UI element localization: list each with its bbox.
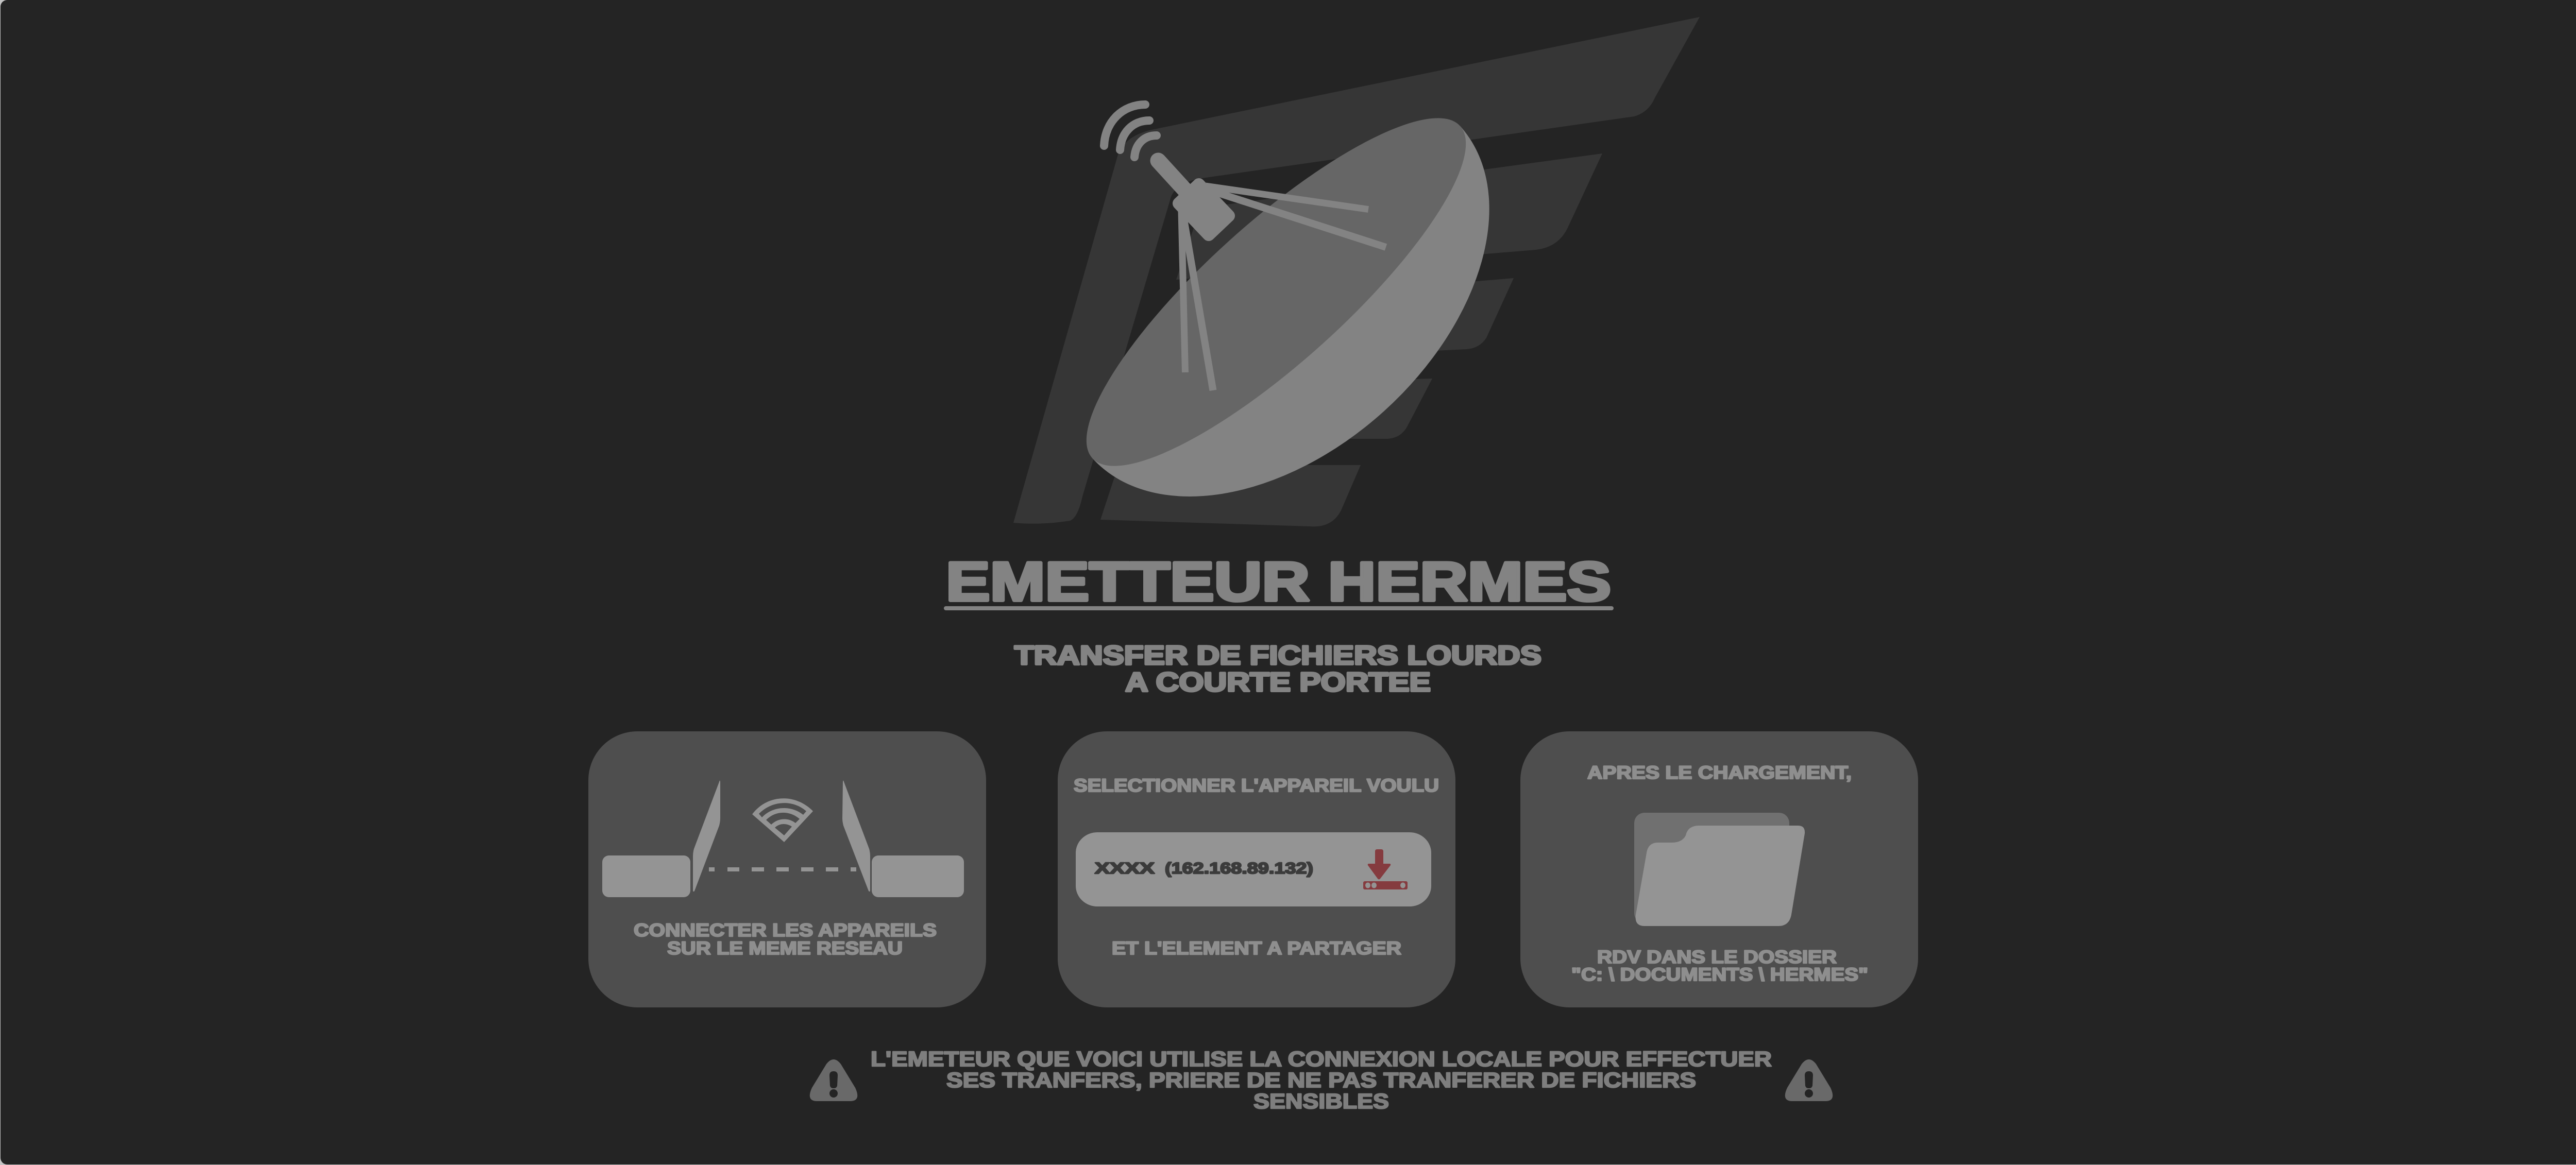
panel: connect devices xyxy=(588,731,986,1007)
device name: XXXX xyxy=(1095,859,1155,877)
caption xyxy=(1571,947,1868,985)
caption: "C: \ DOCUMENTS \ HERMES" xyxy=(1571,965,1868,985)
device name: (162.168.89.132) xyxy=(1165,859,1313,877)
title underline xyxy=(944,606,1614,610)
warning text xyxy=(871,1047,1772,1113)
warning text: SENSIBLES xyxy=(1253,1089,1389,1113)
warning text: SES TRANFERS, PRIERE DE NE PAS TRANFERER DE FICHIERS xyxy=(946,1068,1696,1092)
icon: download xyxy=(1363,849,1408,889)
dish face xyxy=(1046,74,1506,510)
dashed connection xyxy=(709,867,856,871)
logo: winged F emblem xyxy=(1013,17,1700,526)
device name xyxy=(1095,859,1313,877)
caption: CONNECTER LES APPAREILS xyxy=(634,920,937,940)
icon: satellite dish xyxy=(1046,74,1568,577)
icon: right laptop xyxy=(842,781,964,897)
panel: select device xyxy=(1058,731,1455,1007)
caption: SUR LE MEME RESEAU xyxy=(667,938,903,958)
title: EMETTEUR HERMES xyxy=(946,551,1611,612)
icon: left laptop xyxy=(602,781,720,897)
subtitle xyxy=(1014,641,1541,697)
warning text: L'EMETEUR QUE VOICI UTILISE LA CONNEXION LOCALE POUR EFFECTUER xyxy=(871,1047,1772,1071)
heading: SELECTIONNER L'APPAREIL VOULU xyxy=(1074,776,1439,796)
subtitle: A COURTE PORTEE xyxy=(1125,667,1431,697)
icon: warning right xyxy=(1785,1059,1833,1101)
heading: APRES LE CHARGEMENT, xyxy=(1587,763,1852,783)
caption xyxy=(634,920,937,958)
caption: ET L'ELEMENT A PARTAGER xyxy=(1112,938,1401,958)
antenna arm and head xyxy=(1158,161,1229,235)
icon: folder xyxy=(1634,813,1805,926)
panel: destination folder xyxy=(1520,731,1918,1007)
icon: wifi xyxy=(752,798,813,842)
caption: RDV DANS LE DOSSIER xyxy=(1597,947,1837,967)
device row xyxy=(1076,832,1431,906)
dish body xyxy=(1092,126,1568,577)
icon: warning left xyxy=(810,1059,857,1101)
antenna struts xyxy=(1181,186,1386,390)
subtitle: TRANSFER DE FICHIERS LOURDS xyxy=(1014,641,1541,671)
signal waves xyxy=(1104,105,1157,157)
